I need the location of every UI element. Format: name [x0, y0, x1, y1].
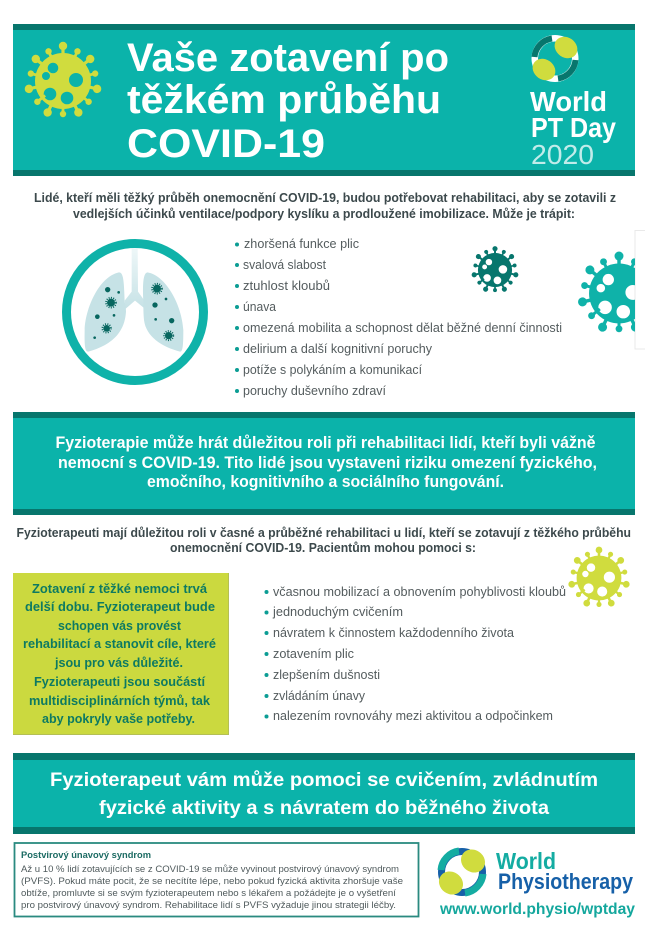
- callout: recovery box: multidisciplinárních týmů, tak: [29, 693, 211, 708]
- World PT Day 2020 logo: 2020: [531, 139, 594, 170]
- icon: lungs in circle: [66, 244, 204, 380]
- panel: post-viral fatigue syndrome: Až u 10 % lidí zotavujících se z COVID-19 se může vyvinout postvirový únavový syndrom: [21, 864, 399, 875]
- list: symptoms: zhoršená funkce plic: [244, 237, 359, 251]
- list: symptoms: [235, 237, 562, 398]
- banner: physiotherapy role: [13, 412, 635, 515]
- title: těžkém průběhu: [127, 78, 441, 122]
- paragraph: role of physiotherapists: Fyzioterapeuti mají důležitou roli v časné a průběžné rehabilitaci u lidí, kteří se zotavují z těžkého průběhu: [16, 526, 631, 540]
- list: symptoms: svalová slabost: [243, 258, 327, 272]
- panel: post-viral fatigue syndrome: obtíže, promluvte si se svým fyzioterapeutem nebo s lékařem a požádejte je o vyšetření: [21, 888, 396, 899]
- title: [127, 36, 449, 166]
- callout: recovery box: Zotavení z těžké nemoci trvá: [32, 581, 208, 596]
- callout: recovery box: Fyzioterapeuti jsou součástí: [34, 674, 205, 689]
- title: Vaše zotavení po: [127, 36, 449, 80]
- list: how physiotherapists help: [264, 585, 566, 723]
- panel: post-viral fatigue syndrome: pro postvirový únavový syndrom. Rehabilitace lidí s PVFS vyžaduje jinou strategii léčby.: [21, 900, 396, 911]
- list: how physiotherapists help: zotavením plic: [273, 647, 354, 661]
- list: symptoms: potíže s polykáním a komunikací: [243, 363, 423, 377]
- list: symptoms: poruchy duševního zdraví: [243, 384, 387, 398]
- callout: recovery box: schopen vás provést: [58, 618, 182, 633]
- banner: physiotherapy role: emočního, kognitivního a sociálního fungování.: [147, 473, 504, 491]
- banner: physiotherapy role: Fyzioterapie může hrát důležitou roli při rehabilitaci lidí, kteří byli vážně: [56, 434, 596, 452]
- callout: recovery box: jsou pro vás důležité.: [54, 655, 183, 670]
- website url: www.world.physio/wptday: [439, 901, 635, 918]
- World PT Day 2020 logo: World: [530, 86, 607, 117]
- list: symptoms: únava: [243, 300, 276, 314]
- panel: post-viral fatigue syndrome: [14, 843, 418, 916]
- header banner: [13, 24, 635, 176]
- World PT Day 2020 logo: PT Day: [531, 112, 616, 143]
- panel: post-viral fatigue syndrome: (PVFS). Pokud máte pocit, že se necítíte lépe, nebo pokud fyzická aktivita zhoršuje vaše: [21, 876, 403, 887]
- callout: recovery box: delší dobu. Fyzioterapeut bude: [25, 599, 215, 614]
- list: how physiotherapists help: včasnou mobilizací a obnovením pohyblivosti kloubů: [273, 585, 566, 599]
- World Physiotherapy logo: [434, 845, 635, 918]
- banner: exercise help: fyzické aktivity a s návratem do běžného života: [99, 798, 549, 819]
- list: symptoms: delirium a další kognitivní poruchy: [243, 342, 433, 356]
- intro paragraph: vedlejších účinků ventilace/podpory kyslíku a prodloužené imobilizace. Může je trápit:: [73, 207, 575, 221]
- intro paragraph: [34, 191, 616, 221]
- paragraph: role of physiotherapists: [16, 526, 631, 555]
- World PT Day 2020 logo: [528, 32, 616, 170]
- banner: exercise help: [13, 753, 635, 834]
- World Physiotherapy logo: World: [496, 848, 556, 874]
- icon: lime virus: [568, 547, 630, 608]
- intro paragraph: Lidé, kteří měli těžký průběh onemocnění COVID-19, budou potřebovat rehabilitaci, aby se zotavili z: [34, 191, 616, 205]
- list: how physiotherapists help: zvládáním únavy: [273, 689, 366, 703]
- callout: recovery box: aby pokryly vaše potřeby.: [42, 711, 195, 726]
- list: how physiotherapists help: jednoduchým cvičením: [272, 605, 403, 619]
- list: symptoms: ztuhlost kloubů: [243, 279, 330, 293]
- list: symptoms: omezená mobilita a schopnost dělat běžné denní činnosti: [243, 321, 562, 335]
- banner: exercise help: Fyzioterapeut vám může pomoci se cvičením, zvládnutím: [50, 770, 598, 791]
- banner: physiotherapy role: nemocní s COVID-19. Tito lidé jsou vystaveni riziku omezení fyzického,: [58, 454, 597, 472]
- paragraph: role of physiotherapists: onemocnění COVID-19. Pacientům mohou pomoci s:: [170, 541, 476, 555]
- icon: yellow virus: [24, 42, 102, 118]
- title: COVID-19: [127, 122, 325, 166]
- panel: post-viral fatigue syndrome: Postvirový únavový syndrom: [21, 850, 151, 861]
- list: how physiotherapists help: návratem k činnostem každodenního života: [273, 626, 514, 640]
- icon: dark virus: [471, 246, 519, 293]
- list: how physiotherapists help: nalezením rovnováhy mezi aktivitou a odpočinkem: [273, 709, 553, 723]
- list: how physiotherapists help: zlepšením dušnosti: [273, 668, 380, 682]
- icon: large teal virus: [577, 230, 645, 349]
- callout: recovery box: rehabilitací a stanovit cíle, které: [23, 636, 216, 651]
- callout: recovery box: [13, 573, 228, 734]
